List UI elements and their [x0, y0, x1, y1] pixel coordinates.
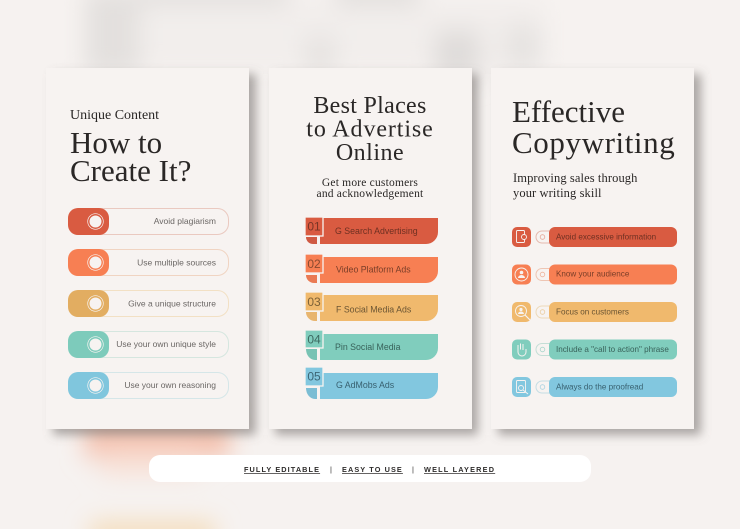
row: avoid excessive information: Avoid excessive information — [556, 232, 656, 242]
row: avoid plagiarism: Avoid plagiarism — [154, 216, 216, 226]
footer text: well layered: WELL LAYERED — [424, 465, 495, 474]
row: include a call to action phrase — [512, 340, 677, 360]
heading: best places to advertise online: to Advertise — [306, 116, 434, 142]
footer banner — [149, 455, 591, 482]
row 05: G AdMobs ads: 05 — [307, 370, 321, 384]
row 04: pin social media — [305, 330, 438, 360]
row: use your own unique style: Use your own unique style — [116, 339, 216, 349]
subheading: improving sales: Improving sales through — [513, 171, 638, 185]
row: avoid plagiarism — [68, 208, 228, 235]
row 02: video platform ads — [305, 254, 438, 283]
row: know your audience: Know your audience — [556, 270, 630, 278]
row: use multiple sources — [68, 249, 228, 276]
row: know your audience — [512, 264, 677, 284]
row 04: pin social media: Pin Social Media — [335, 342, 401, 352]
footer text: easy to use: EASY TO USE — [342, 465, 403, 474]
row 05: G AdMobs ads: G AdMobs Ads — [336, 380, 395, 390]
footer separator: | — [330, 465, 332, 474]
panel: how to create it — [46, 68, 249, 429]
row: always do the proofread — [512, 377, 677, 397]
icon: magnifier with person — [512, 302, 531, 322]
label: unique content: Unique Content — [70, 108, 159, 123]
panel: best places to advertise — [269, 68, 472, 429]
row 03: F social media ads: 03 — [307, 295, 321, 309]
panel: effective copywriting — [491, 68, 694, 429]
row 03: F social media ads: F Social Media Ads — [336, 304, 412, 314]
heading: best places to advertise online: Best Places — [313, 93, 427, 119]
subheading: get more customers: and acknowledgement — [317, 188, 424, 200]
footer text: fully editable: FULLY EDITABLE — [244, 465, 320, 474]
row 01: G search advertising: 01 — [307, 220, 321, 234]
heading: how to create it: How to — [70, 125, 162, 160]
subheading: improving sales: your writing skill — [513, 186, 602, 200]
row 01: G search advertising: G Search Advertising — [335, 226, 418, 236]
icon: document check — [512, 377, 531, 397]
footer separator: | — [412, 465, 414, 474]
row: avoid excessive information — [512, 227, 677, 247]
row: include a call to action phrase: Include a "call to action" phrase — [556, 345, 669, 354]
row 01: G search advertising — [305, 217, 438, 244]
blurred background shapes — [85, 0, 545, 529]
row: give a unique structure — [68, 290, 228, 317]
heading: best places to advertise online: Online — [336, 140, 404, 166]
row: give a unique structure: Give a unique structure — [128, 298, 216, 308]
heading: how to create it: Create It? — [70, 153, 191, 188]
icon: document search — [512, 227, 531, 247]
heading: effective copywriting: Copywriting — [512, 125, 675, 160]
row: use your own unique style — [68, 331, 228, 358]
icon: person in circle — [512, 264, 531, 284]
row 05: G AdMobs ads — [305, 367, 438, 399]
row 03: F social media ads — [305, 292, 438, 321]
heading: effective copywriting: Effective — [512, 94, 625, 129]
row: use multiple sources: Use multiple sources — [137, 258, 216, 268]
row: use your own reasoning: Use your own reasoning — [124, 380, 216, 390]
icon: hand — [512, 340, 531, 360]
row: always do the proofread: Always do the proofread — [556, 382, 643, 392]
row 02: video platform ads: 02 — [307, 257, 321, 271]
row: focus on customers: Focus on customers — [556, 308, 629, 316]
row: use your own reasoning — [68, 372, 228, 399]
row 02: video platform ads: Video Platform Ads — [336, 264, 411, 274]
subheading: get more customers: Get more customers — [322, 177, 418, 189]
row: focus on customers — [512, 302, 677, 322]
card shadows — [53, 74, 701, 435]
row 04: pin social media: 04 — [307, 332, 321, 346]
